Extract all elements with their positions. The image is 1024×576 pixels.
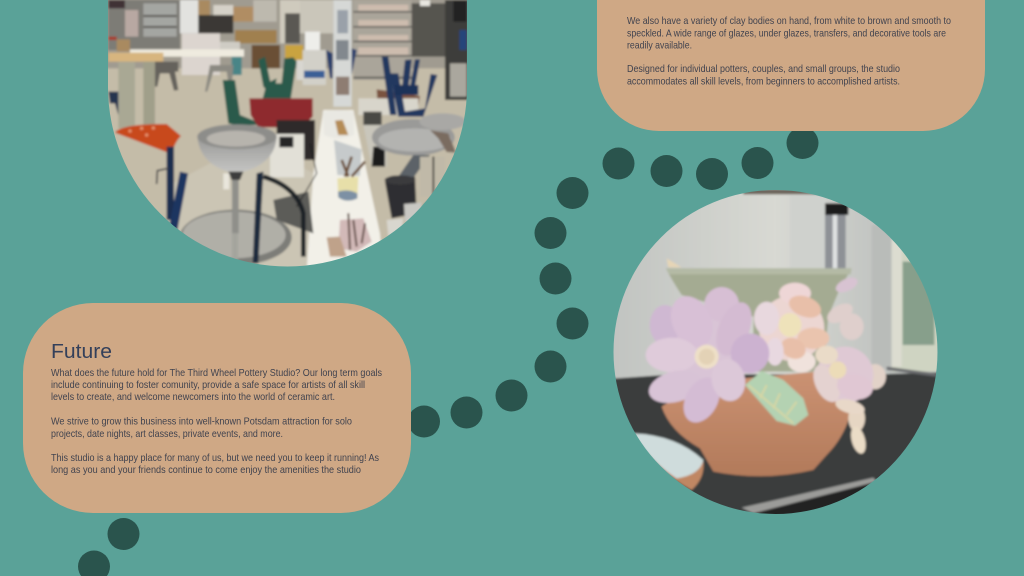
text block: clay and glazes: We also have a variety of clay bodies on hand, from white to brown and smooth to (627, 16, 951, 27)
text block: growth (51, 416, 352, 440)
photo: studio interior with pottery wheels (100, 0, 475, 275)
text block: call to support: This studio is a happy place for many of us, but we need you to keep it running! As (51, 453, 379, 464)
text block: growth: projects, date nights, art classes, private events, and more. (51, 429, 283, 440)
dotted path: upper right (408, 127, 818, 438)
text block: clay and glazes (627, 16, 951, 52)
text block: call to support: long as you and your friends continue to come enjoy the amenities the studio (51, 465, 361, 476)
panel: studio description (597, 0, 985, 131)
right flower back petals (824, 275, 886, 455)
text block: long term goals: levels to create, and welcome newcomers into the world of ceramic art. (51, 392, 335, 403)
text block: clay and glazes: readily available. (627, 40, 692, 52)
dotted path: lower left (78, 518, 140, 576)
text block: clay and glazes: speckled. A wide range of glazes, under glazes, transfers, and decorative tools are (627, 28, 946, 40)
text block: long term goals: include continuing to foster comunity, provide a safe space for artists of all skill (51, 380, 365, 391)
text block: who it is for: Designed for individual potters, couples, and small groups, the studio (627, 64, 900, 75)
text block: call to support (51, 453, 379, 476)
text block: who it is for (627, 64, 900, 88)
vase body (662, 372, 850, 476)
left flower (688, 320, 731, 380)
heading: Future: Future (51, 340, 112, 363)
text block: growth: We strive to grow this business into well-known Potsdam attraction for solo (51, 416, 352, 428)
panel: future (23, 303, 411, 513)
text block: who it is for: accommodates all skill levels, from beginners to accomplished artists. (627, 76, 900, 88)
right flower (817, 347, 873, 403)
text block: long term goals: What does the future hold for The Third Wheel Pottery Studio? Our long term goals (51, 368, 382, 379)
text block: long term goals (51, 368, 382, 403)
photo: terracotta vase with clay flowers (607, 182, 943, 518)
middle flower (759, 296, 824, 361)
